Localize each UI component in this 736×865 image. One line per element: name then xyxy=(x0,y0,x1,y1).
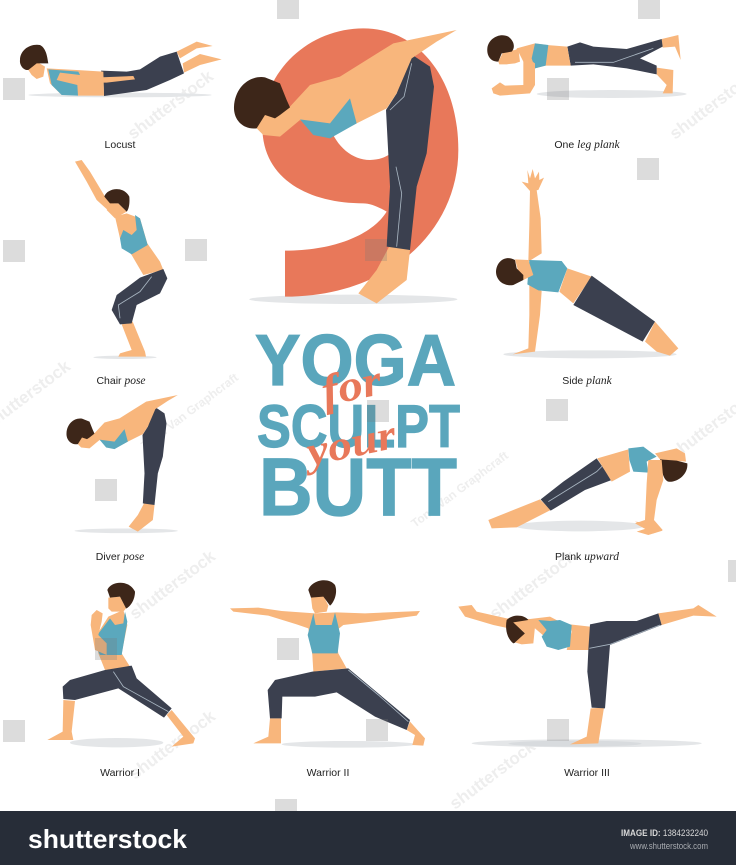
pose: One leg plank xyxy=(487,35,687,98)
watermark text layer: Tond Van Graphcraft xyxy=(408,448,511,530)
pose labels: Diver pose xyxy=(96,551,144,563)
pose labels: Warrior II xyxy=(307,767,349,779)
pose: Chair xyxy=(75,160,167,359)
pose labels: Locust xyxy=(105,139,136,151)
pose: Warrior II xyxy=(230,580,425,748)
pose labels xyxy=(96,139,621,779)
pose labels: Warrior I xyxy=(100,767,140,779)
pose: Plank upward xyxy=(488,447,687,535)
watermark text layer: shutterstock xyxy=(486,546,579,623)
title xyxy=(255,321,460,533)
title: YOGA xyxy=(255,321,456,401)
pose labels: Side plank xyxy=(562,375,613,387)
pose: Side plank xyxy=(496,169,678,358)
title: SCULPT xyxy=(257,393,460,460)
footer bar xyxy=(0,811,736,865)
title: BUTT xyxy=(259,442,457,533)
watermark text layer: shutterstock xyxy=(126,546,219,623)
pose labels: Plank upward xyxy=(555,551,619,563)
title: your xyxy=(297,412,401,477)
watermark text layer: shutterstock xyxy=(446,736,539,813)
pose: Diver xyxy=(66,395,178,533)
pose: Locust xyxy=(20,42,222,97)
pose: Warrior III xyxy=(458,605,717,747)
image id: IMAGE ID: 1384232240 xyxy=(621,828,708,839)
watermark text layer: shutterstock xyxy=(124,66,217,143)
pose labels: Warrior III xyxy=(564,767,610,779)
pose: Warrior I xyxy=(47,583,195,747)
website: www.shutterstock.com xyxy=(629,841,708,851)
number nine with forward-fold figure xyxy=(234,28,458,304)
shadow under nine xyxy=(249,295,457,304)
pose labels: One leg plank xyxy=(554,139,621,151)
title: for xyxy=(317,355,387,416)
numeral 9 xyxy=(262,28,458,297)
pose labels: Chair pose xyxy=(96,375,146,387)
footer logo: shutterstock xyxy=(28,824,188,854)
figure: standing forward fold xyxy=(234,30,457,303)
watermark text layer: shutterstock xyxy=(126,706,219,783)
watermark text layer: Tond Van Graphcraft xyxy=(138,370,241,452)
